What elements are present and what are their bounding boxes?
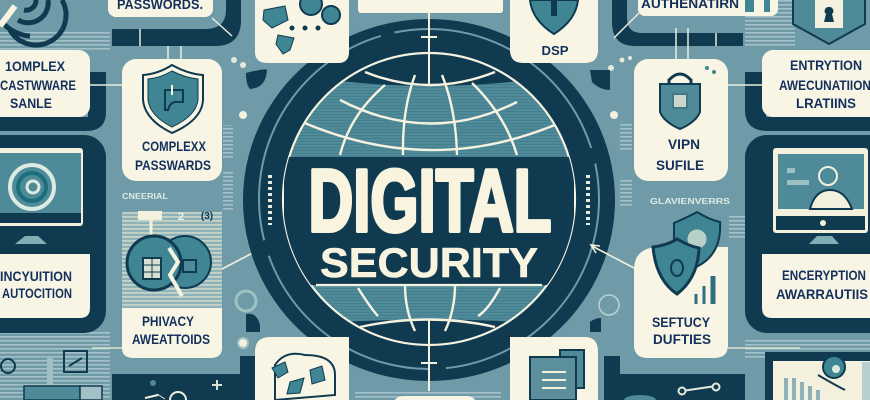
icon: shield bbox=[143, 65, 203, 133]
panel: bottom-right dark bbox=[604, 356, 745, 400]
card: world map top bbox=[255, 0, 349, 63]
card: authentication bbox=[638, 0, 778, 16]
label: glavienverb: GLAVIENVERRS bbox=[650, 197, 731, 206]
card: complex passwords: COMPLEXX bbox=[142, 138, 207, 154]
laurels bbox=[270, 175, 588, 225]
card: complex castware bbox=[0, 50, 90, 117]
card: complex castware: SANLE bbox=[10, 95, 52, 111]
globe badge bbox=[243, 12, 615, 400]
card: dsp bbox=[510, 0, 598, 63]
card: safety duties bbox=[634, 197, 731, 358]
card: privacy awareness bbox=[122, 192, 222, 358]
card: vpn: SUFILE bbox=[656, 157, 704, 173]
card: privacy awareness: AWEATTOIDS bbox=[132, 331, 210, 347]
arrow: safety to globe bbox=[591, 245, 634, 268]
monitor right bbox=[745, 135, 870, 333]
connector lines right bbox=[614, 12, 762, 85]
icon: vpn lock bbox=[660, 74, 700, 129]
card: safety duties: DUFTIES bbox=[653, 331, 711, 347]
panel: bottom centre stripes bbox=[355, 391, 501, 400]
label: cheerial: CNEERIAL bbox=[122, 192, 168, 201]
bars bbox=[696, 276, 714, 304]
card: privacy awareness: 2 bbox=[178, 211, 184, 223]
panel: top-left frame bbox=[112, 0, 241, 46]
card: dsp: DSP bbox=[542, 43, 569, 58]
card: complex castware: CASTWWARE bbox=[0, 77, 76, 93]
connector lines bbox=[90, 18, 232, 85]
card: documents bbox=[510, 337, 598, 400]
card: encryption autocition: AUTOCITION bbox=[2, 285, 72, 301]
card: privacy awareness: PHIVACY bbox=[142, 313, 195, 329]
card: complex castware: 1OMPLEX bbox=[5, 58, 66, 74]
decorative dots and blobs right bbox=[590, 56, 632, 332]
title: digital: DIGITAL bbox=[308, 151, 552, 250]
card: safety duties: SEFTUCY bbox=[652, 314, 711, 330]
panel: top-right frame bbox=[612, 0, 743, 46]
card: vpn: VIPN bbox=[668, 136, 700, 152]
card: encryption autocition bbox=[0, 254, 90, 318]
monitor: bottom right chart bbox=[765, 352, 870, 400]
panel: bottom-left dark bbox=[112, 356, 255, 400]
card: brain map bottom bbox=[255, 337, 349, 400]
arrow: privacy to globe bbox=[222, 245, 267, 269]
card: complex passwords: PASSWARDS bbox=[135, 157, 211, 173]
card: privacy awareness: (3) bbox=[201, 211, 213, 222]
card: encryption awareness bbox=[762, 254, 870, 318]
card: encryption autocition: INCYUITION bbox=[0, 268, 72, 284]
card: entryption bbox=[762, 50, 870, 117]
icon: padlock shield bbox=[793, 0, 865, 44]
icon: fingerprint target bbox=[0, 0, 66, 45]
panel: left connector frame bbox=[0, 72, 106, 131]
card: complex passwords bbox=[122, 59, 222, 181]
icon: overlapping privacy circles bbox=[127, 236, 211, 296]
monitor left bbox=[0, 135, 106, 333]
panel: right connector frame bbox=[745, 72, 870, 131]
arrow: privacy to bottom-left bbox=[92, 347, 122, 349]
card: vpn bbox=[634, 59, 728, 181]
connector right lower bbox=[728, 347, 800, 349]
title: security: SECURITY bbox=[320, 239, 538, 286]
globe grid bbox=[290, 70, 568, 332]
card: entryption: ENTRYTION bbox=[790, 57, 862, 73]
globe meridian lines bbox=[421, 12, 437, 400]
card: entryption: LRATIINS bbox=[796, 95, 856, 111]
card: passwords bbox=[108, 0, 213, 17]
icon: double shield bbox=[653, 212, 720, 294]
card: top centre bbox=[358, 0, 503, 13]
icons: bottom-left devices bbox=[1, 351, 102, 400]
decorative dots and blobs left bbox=[231, 57, 267, 348]
